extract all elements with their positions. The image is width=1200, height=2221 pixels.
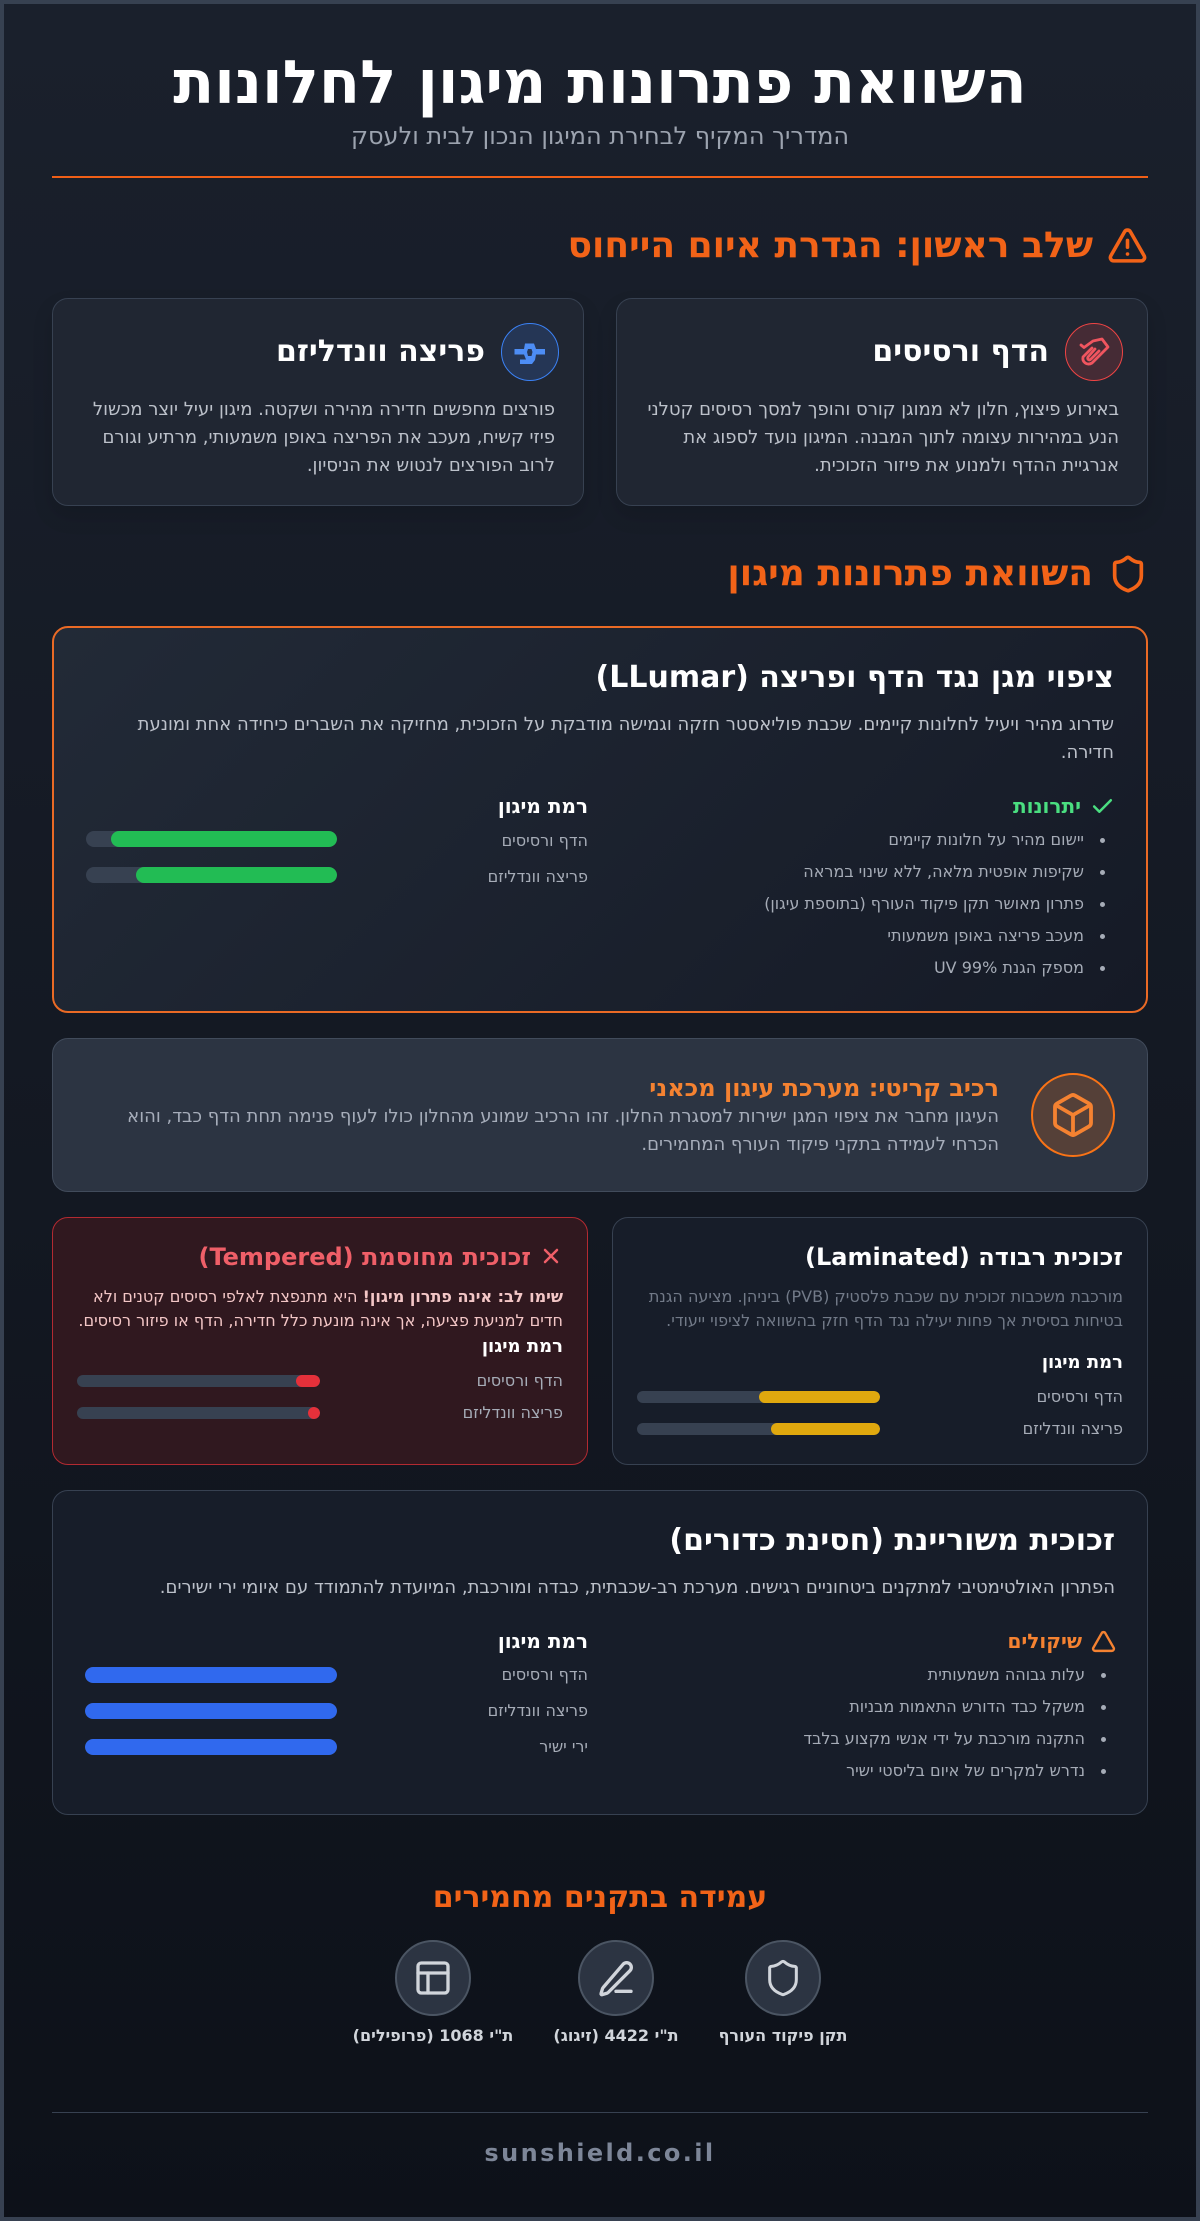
callout: mechanical anchoring: [52, 1038, 1148, 1192]
consideration items: [803, 1665, 1106, 1780]
panel description: חדירה.: [1061, 742, 1114, 763]
card body: אנרגיית ההדף ולמנוע את פיזור הזכוכית.: [814, 455, 1119, 476]
protection level chart: הדף ורסיסים: [502, 1665, 588, 1684]
chart heading: רמת מיגון: [498, 1629, 588, 1653]
advantage items: שקיפות אופטית מלאה, ללא שינוי במראה: [803, 862, 1084, 881]
advantage items: יישום מהיר על חלונות קיימים: [888, 830, 1084, 849]
consideration items: משקל כבד הדורש התאמות מבניות: [849, 1697, 1085, 1716]
icon: check: [1092, 798, 1112, 813]
protection level chart: [86, 794, 588, 886]
protection level chart: הדף ורסיסים: [502, 831, 588, 850]
section heading: solutions comparison: [727, 553, 1144, 594]
title: השוואת פתרונות מיגון לחלונות: [173, 48, 1027, 118]
advantages list: [764, 794, 1112, 977]
panel: tempered glass warning: [52, 1217, 588, 1465]
footer site name: sunshield.co.il: [484, 2139, 716, 2167]
protection level chart: [85, 1629, 588, 1756]
consideration items: עלות גבוהה משמעותית: [928, 1665, 1085, 1684]
callout heading: רכיב קריטי: מערכת עיגון מכאני: [649, 1074, 999, 1102]
card body: [93, 399, 555, 476]
header divider: [52, 176, 1148, 178]
panel description: בטיחות בסיסית אך פחות יעילה נגד הדף חזק בהשוואה לציפוי ייעודי.: [666, 1311, 1123, 1330]
callout text: הכרחי לעמידה בתקני פיקוד העורף המחמירים.: [641, 1134, 999, 1155]
footer divider: [52, 2112, 1148, 2113]
card body: פיזי קשיח, מעכב את הפריצה באופן משמעותי, מרתיע וגורם: [102, 427, 555, 448]
protection level chart: הדף ורסיסים: [477, 1371, 563, 1390]
advantage items: פתרון מאושר תקן פיקוד העורף (בתוספת עיגון): [764, 894, 1084, 913]
card body: לרוב הפורצים לנטוש את הניסיון.: [307, 455, 555, 476]
warning text: חדים למניעת פציעה, אך אינה מונעת כלל חדירה, הדף או פיזור רסיסים.: [78, 1311, 563, 1330]
section heading: standards: עמידה בתקנים מחמירים: [433, 1880, 767, 1915]
label: תקן פיקוד העורף: [719, 2026, 847, 2045]
protection level chart: פריצה וונדליזם: [1023, 1419, 1123, 1438]
section heading: threat definition: [568, 225, 1146, 266]
icon: shield: [745, 1940, 821, 2016]
panel: burglary and vandalism: [52, 298, 584, 506]
card body: [647, 399, 1119, 476]
icon: x mark: [544, 1248, 558, 1264]
protection level chart: פריצה וונדליזם: [488, 1701, 588, 1720]
panel: laminated glass: [612, 1217, 1148, 1465]
consideration items: התקנה מורכבת על ידי אנשי מקצוע בלבד: [803, 1729, 1085, 1748]
icon: blast: [1065, 323, 1123, 381]
icon: break-in: [501, 323, 559, 381]
card heading: פריצה וונדליזם: [276, 334, 485, 369]
protection level chart: ירי ישיר: [539, 1737, 588, 1756]
panel description: [138, 714, 1114, 763]
heading text: השוואת פתרונות מיגון: [727, 553, 1093, 594]
subtitle: המדריך המקיף לבחירת המיגון הנכון לבית ולעסק: [351, 122, 849, 150]
card body: הנע במהירות עצומה לתוך המבנה. המיגון נועד לספוג את: [683, 427, 1119, 448]
advantage items: [764, 830, 1105, 977]
advantage items: מספק הגנת 99% UV: [934, 958, 1084, 977]
warning text: [78, 1287, 563, 1330]
panel heading: זכוכית מחוסמת (Tempered): [198, 1243, 531, 1271]
panel: blast and fragments: [616, 298, 1148, 506]
protection level chart: פריצה וונדליזם: [463, 1403, 563, 1422]
panel description: שדרוג מהיר ויעיל לחלונות קיימים. שכבת פוליאסטר חזקה וגמישה מודבקת על הזכוכית, מחזיקה את השברים כיחידה אחת ומונעת: [138, 714, 1114, 735]
considerations list: [803, 1629, 1116, 1780]
protection level chart: הדף ורסיסים: [1037, 1387, 1123, 1406]
chart heading: רמת מיגון: [482, 1336, 563, 1357]
panel: armored glass: [52, 1490, 1148, 1815]
standard: IS 4422: [553, 1940, 679, 2045]
icon: box: [1031, 1073, 1115, 1157]
icon: warning triangle: [1108, 228, 1146, 263]
chart heading: רמת מיגון: [498, 794, 588, 818]
standard: home front command: [719, 1940, 847, 2045]
panel description: הפתרון האולטימטיבי למתקנים ביטחוניים רגישים. מערכת רב-שכבתית, כבדה ומורכבת, המיועדת להתמודד עם איומי ירי ישירים.: [160, 1577, 1115, 1598]
advantage items: מעכב פריצה באופן משמעותי: [887, 926, 1084, 945]
callout text: העיגון מחבר את ציפוי המגן ישירות למסגרת החלון. זהו הרכיב שמונע מהחלון כולו לעוף פנימה תחת הדף כבד, והוא: [127, 1106, 999, 1127]
icon: layout: [395, 1940, 471, 2016]
protection level chart: פריצה וונדליזם: [488, 867, 588, 886]
advantages heading: יתרונות: [1013, 794, 1081, 818]
icon: triangle: [1092, 1630, 1116, 1652]
panel description: [649, 1287, 1123, 1330]
considerations heading: שיקולים: [1007, 1629, 1082, 1653]
card heading: הדף ורסיסים: [872, 334, 1049, 369]
warning text: שימו לב: אינה פתרון מיגון! היא מתנפצת לאלפי רסיסים קטנים ולא: [93, 1287, 563, 1306]
card body: פורצים מחפשים חדירה מהירה ושקטה. מיגון יעיל יוצר מכשול: [93, 399, 555, 420]
panel heading: זכוכית רבודה (Laminated): [805, 1243, 1123, 1271]
card body: באירוע פיצוץ, חלון לא ממוגן קורס והופך למסך רסיסים קטלני: [647, 399, 1119, 420]
protection level chart: [77, 1336, 563, 1422]
panel: LLumar safety film: [52, 626, 1148, 1013]
panel heading: זכוכית משוריינת (חסינת כדורים): [669, 1523, 1115, 1558]
chart heading: רמת מיגון: [1042, 1352, 1123, 1373]
consideration items: נדרש למקרים של איום בליסטי ישיר: [846, 1761, 1085, 1780]
callout text: [127, 1106, 999, 1155]
icon: shield: [1112, 556, 1144, 592]
panel heading: ציפוי מגן נגד הדף ופריצה (LLumar): [596, 660, 1114, 695]
label: ת"י 1068 (פרופילים): [353, 2026, 513, 2045]
icon: pen: [578, 1940, 654, 2016]
standard: IS 1068: [353, 1940, 513, 2045]
label: ת"י 4422 (זיגוג): [553, 2026, 679, 2045]
panel description: מורכבת משכבות זכוכית עם שכבת פלסטיק (PVB) ביניהן. מציעה הגנת: [649, 1287, 1123, 1306]
heading text: שלב ראשון: הגדרת איום הייחוס: [568, 225, 1093, 266]
protection level chart: [637, 1352, 1123, 1438]
